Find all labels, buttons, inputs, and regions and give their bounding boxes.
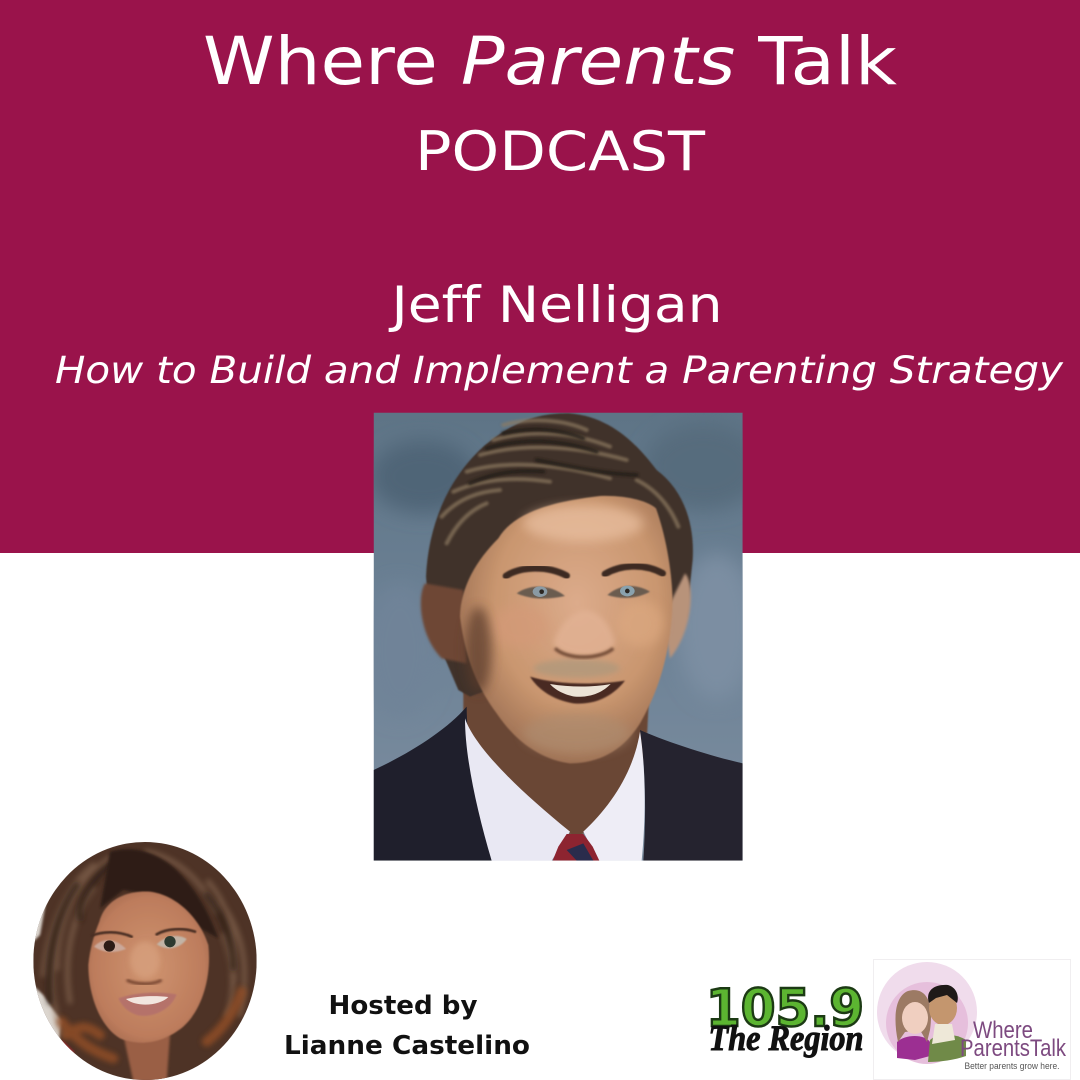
logo wordmark: Where: [973, 1017, 1033, 1044]
host credit: Hosted by: [328, 991, 478, 1021]
shirt: [465, 718, 570, 861]
logo: Where Parents Talk: Better parents grow here.: [964, 1061, 1060, 1071]
host credit: [284, 991, 530, 1061]
eyes: [94, 940, 126, 952]
hair highlights: [442, 420, 678, 543]
episode title: How to Build and Implement a Parenting Strategy: [55, 349, 1064, 392]
hair back: [426, 413, 693, 697]
logo: 105.9 The Region: The Region: [708, 1018, 864, 1058]
hair strands: [43, 852, 244, 1035]
nose: [553, 610, 615, 656]
logo circles: [877, 962, 977, 1062]
eyebrows: [92, 932, 132, 937]
nose: [130, 942, 159, 977]
guest portrait photo: [363, 413, 763, 861]
subtitle: podcast: PODCAST: [415, 120, 706, 183]
photo background slivers: [35, 904, 62, 1040]
logo: Where Parents Talk: [874, 960, 1070, 1080]
smile: [118, 993, 177, 1016]
host portrait photo: [33, 842, 257, 1080]
title: Where Parents Talk: [203, 23, 898, 100]
face: [88, 891, 209, 1043]
neck: [462, 692, 650, 834]
logo: couple illustration: [895, 985, 966, 1062]
eyebrows: [506, 568, 567, 576]
guest name: Jeff Nelligan: [388, 276, 722, 334]
tie: [553, 834, 599, 861]
suit: [374, 707, 492, 861]
neck: [123, 1035, 170, 1080]
logo: 105.9 The Region: 105.9: [706, 979, 864, 1039]
background: crimson header band: [0, 0, 1080, 553]
eyes: [517, 587, 565, 599]
host credit: Lianne Castelino: [284, 1031, 530, 1061]
smile: [530, 677, 625, 704]
face: [460, 496, 673, 763]
ears: [421, 583, 467, 663]
